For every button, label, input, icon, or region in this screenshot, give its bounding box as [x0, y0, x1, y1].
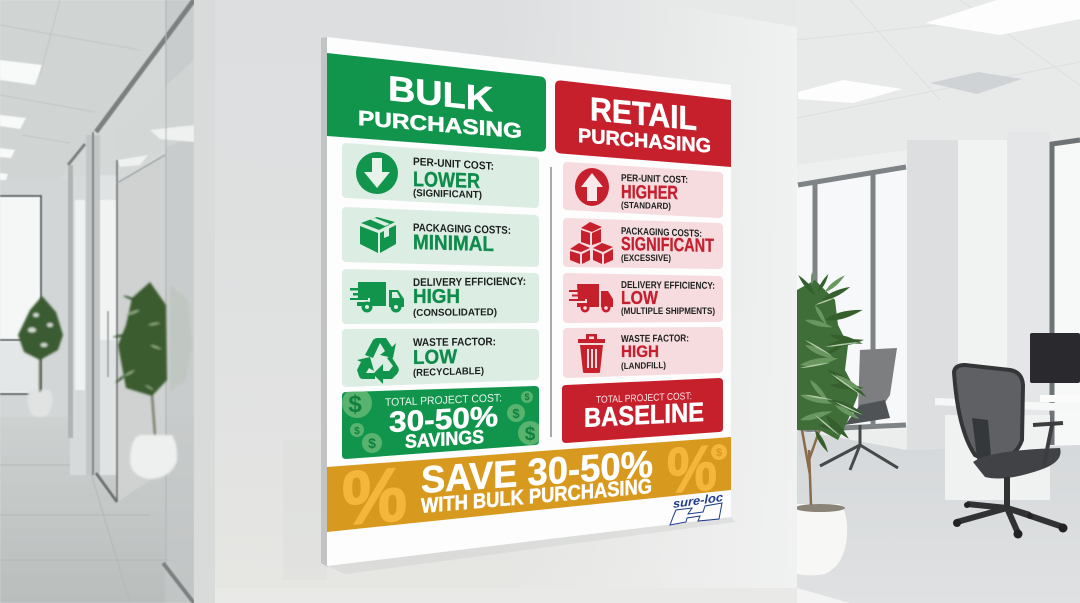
- heading: bulk purchasing: BULK: [388, 69, 494, 120]
- card: waste factor high: [567, 331, 719, 374]
- callout: total project cost baseline: [562, 378, 723, 443]
- card: waste factor low: LOW: [413, 346, 457, 369]
- icon: recycle symbol: [357, 338, 399, 384]
- icon: dollar coins: $: [354, 426, 360, 437]
- card: per-unit cost higher: PER-UNIT COST:: [621, 173, 688, 186]
- callout: total project cost baseline: TOTAL PROJECT COST:: [596, 391, 692, 406]
- office background: right open-plan area: [797, 0, 1080, 603]
- card: delivery efficiency low: DELIVERY EFFICIENCY:: [621, 280, 715, 292]
- office background: left corridor: [0, 0, 200, 603]
- icon: dollar coins: [342, 388, 542, 453]
- card: waste factor high: (LANDFILL): [621, 360, 666, 371]
- card: per-unit cost lower: [346, 147, 535, 204]
- card: packaging costs significant: [567, 222, 719, 265]
- heading: retail purchasing: [555, 80, 731, 167]
- icon: potted plant: [795, 272, 869, 576]
- banner: save 30-50%: [327, 431, 731, 542]
- banner: save 30-50%: SAVE 30-50%: [421, 444, 653, 502]
- icon: dollar coins: $: [524, 392, 530, 402]
- poster: [321, 37, 731, 567]
- card: waste factor low: WASTE FACTOR:: [413, 336, 496, 349]
- icon: right percent sign with coin: $: [716, 447, 722, 459]
- callout: total project cost baseline: BASELINE: [584, 397, 704, 433]
- icon: stack of boxes: [570, 222, 613, 264]
- panel: retail purchasing column: [555, 80, 731, 443]
- card: delivery efficiency low: LOW: [621, 288, 658, 308]
- icon: foreground office chair: [953, 365, 1068, 538]
- callout: total project cost savings: TOTAL PROJECT COST:: [385, 392, 502, 409]
- icon: delivery truck: [569, 284, 613, 312]
- icon: corridor plants: [18, 282, 192, 479]
- panel: bulk purchasing column: [327, 53, 546, 459]
- card: waste factor low: (RECYCLABLE): [413, 366, 484, 379]
- logo: sure-loc: sure-loc: [673, 490, 723, 511]
- icon: dollar coins: $: [512, 406, 520, 421]
- card: per-unit cost lower: LOWER: [413, 168, 480, 193]
- card: waste factor high: HIGH: [621, 342, 659, 361]
- divider: [550, 167, 552, 437]
- callout: total project cost savings: SAVINGS: [405, 427, 484, 453]
- feature wall: [194, 0, 797, 603]
- card: per-unit cost higher: (STANDARD): [621, 200, 671, 211]
- icon: delivery truck: [350, 282, 404, 312]
- icon: desk and monitor: [935, 333, 1080, 500]
- banner: save 30-50%: WITH BULK PURCHASING: [421, 475, 652, 518]
- icon: background office chair: [820, 348, 898, 470]
- icon: trash can: [578, 334, 605, 373]
- icon: dollar coins: $: [368, 435, 376, 451]
- callout: total project cost savings: [342, 386, 542, 459]
- heading: retail purchasing: RETAIL: [590, 91, 697, 138]
- card: delivery efficiency high: (CONSOLIDATED): [413, 307, 497, 319]
- card: waste factor low: [346, 333, 535, 384]
- card: packaging costs minimal: [346, 211, 535, 263]
- icon: up arrow: [575, 168, 609, 206]
- heading: bulk purchasing: PURCHASING: [358, 107, 522, 143]
- callout: total project cost savings: 30-50%: [389, 401, 498, 439]
- icon: left percent sign: %: [342, 452, 407, 542]
- card: packaging costs minimal: MINIMAL: [413, 231, 494, 256]
- icon: cardboard box: [360, 217, 396, 253]
- card: packaging costs significant: PACKAGING COSTS:: [621, 226, 702, 240]
- heading: retail purchasing: PURCHASING: [578, 125, 711, 158]
- card: per-unit cost lower: (SIGNIFICANT): [413, 188, 482, 201]
- logo: sure-loc: [670, 490, 723, 525]
- card: packaging costs minimal: PACKAGING COSTS:: [413, 222, 511, 237]
- icon: down arrow: [356, 152, 398, 194]
- heading: bulk purchasing: [327, 53, 546, 152]
- card: packaging costs significant: SIGNIFICANT: [621, 234, 714, 257]
- card: waste factor high: WASTE FACTOR:: [621, 333, 689, 345]
- card: per-unit cost lower: PER-UNIT COST:: [413, 156, 494, 173]
- card: packaging costs significant: (EXCESSIVE): [621, 253, 671, 263]
- poster edge shadow: [321, 37, 328, 567]
- icon: dollar coins: $: [348, 391, 362, 418]
- card: per-unit cost higher: [567, 166, 719, 214]
- icon: dollar coins: $: [525, 424, 536, 445]
- icon: right percent sign with coin: %: [667, 431, 717, 507]
- card: delivery efficiency high: [346, 273, 535, 320]
- card: delivery efficiency low: (MULTIPLE SHIPMENTS): [621, 306, 715, 316]
- card: delivery efficiency high: DELIVERY EFFICIENCY:: [413, 276, 526, 289]
- card: delivery efficiency low: [567, 277, 719, 319]
- card: delivery efficiency high: HIGH: [413, 286, 460, 308]
- card: per-unit cost higher: HIGHER: [621, 182, 678, 204]
